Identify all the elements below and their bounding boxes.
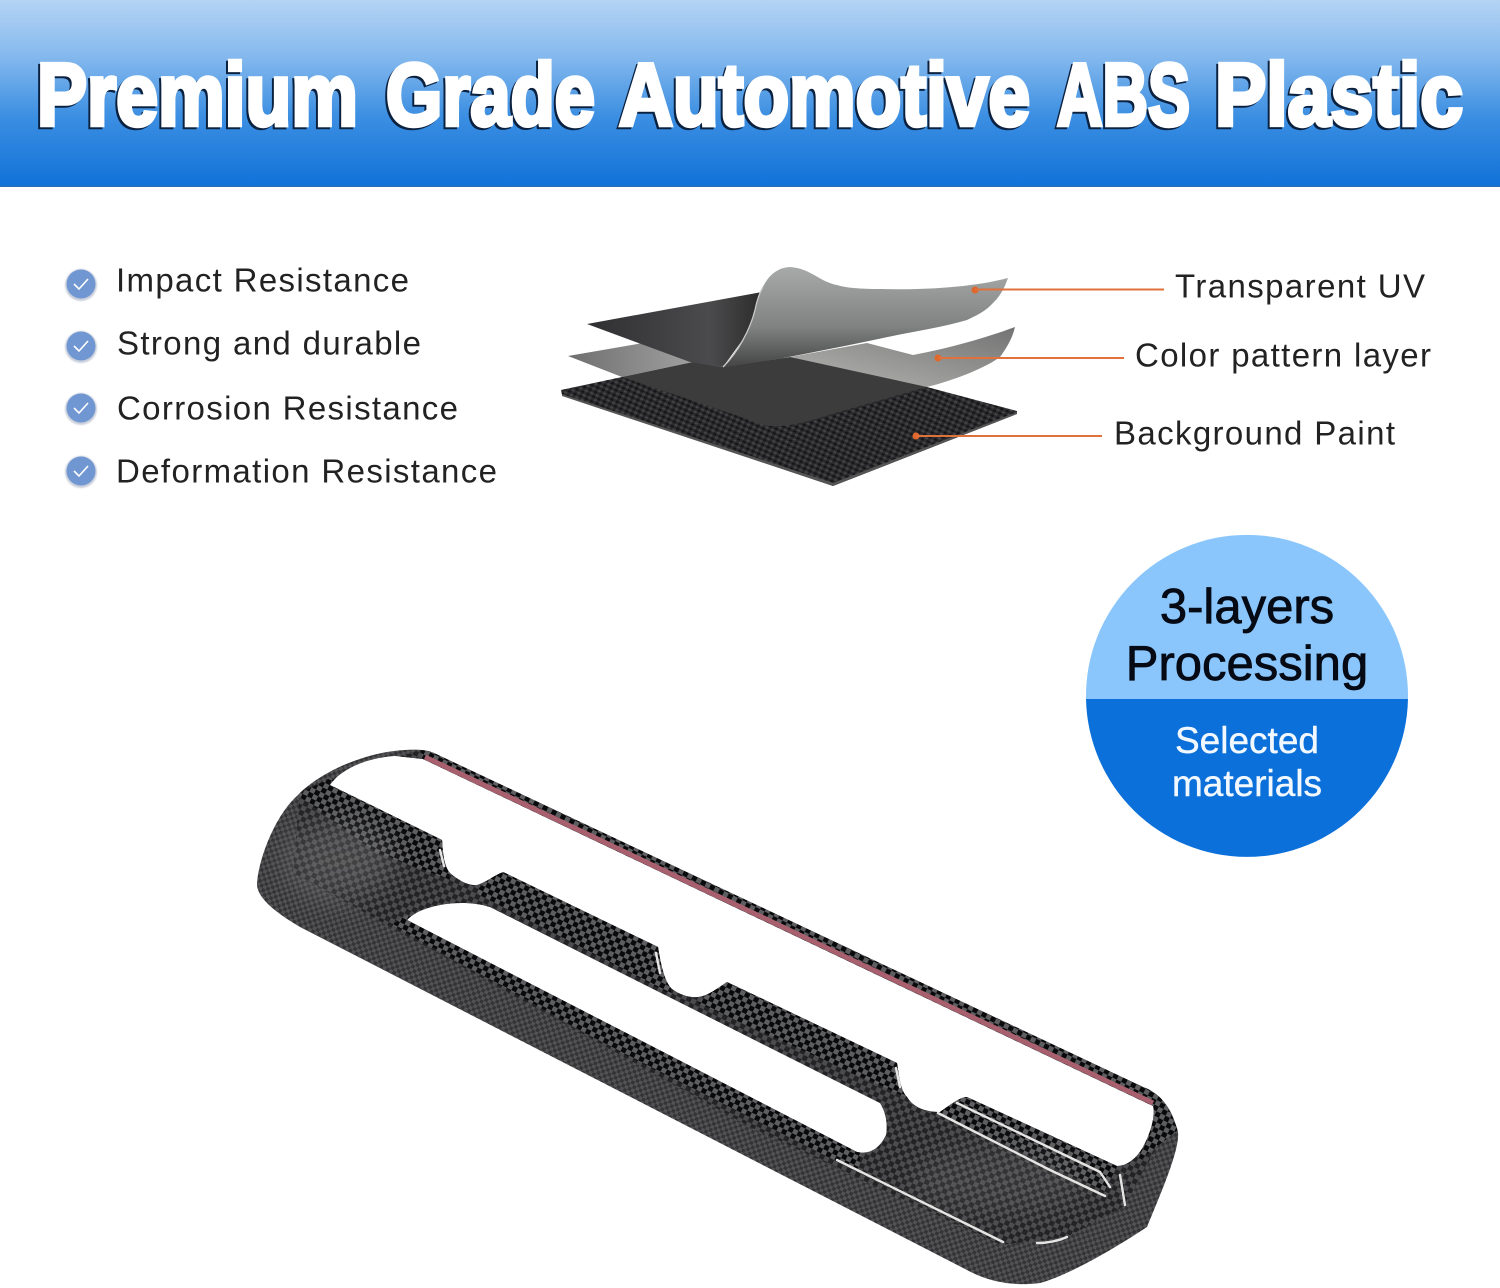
title: Automotive [619, 45, 1030, 144]
callout line: color pattern layer [934, 354, 1124, 362]
item: Impact Resistance: Impact Resistance [116, 262, 409, 298]
item: Deformation Resistance: Deformation Resistance [116, 452, 497, 490]
header banner [0, 0, 1500, 187]
label: Background Paint: Background Paint [1114, 414, 1395, 452]
title [35, 45, 1463, 146]
callout line: background paint [912, 432, 1102, 440]
badge heading: Processing [1126, 637, 1368, 691]
label: Transparent UV: Transparent UV [1175, 268, 1425, 304]
badge heading: 3-layers [1160, 580, 1334, 634]
title: Premium [35, 47, 356, 146]
title: Premium [37, 45, 358, 144]
title: Grade [384, 47, 593, 146]
badge subheading [1172, 720, 1322, 804]
label: Color pattern layer: Color pattern layer [1135, 336, 1431, 374]
title: Automotive [617, 47, 1028, 146]
title: Grade [386, 45, 595, 144]
item: Strong and durable: Strong and durable [117, 324, 421, 362]
title: ABS [1057, 45, 1190, 144]
callout line: transparent UV [972, 286, 1164, 294]
layer diagram [561, 267, 1431, 486]
product: carbon fiber trim frame [240, 740, 1190, 1288]
bottom layer: background paint [561, 377, 1017, 486]
title: Plastic [1213, 47, 1461, 146]
badge: 3-layers processing [1086, 535, 1408, 857]
item: Corrosion Resistance: Corrosion Resistance [117, 390, 458, 426]
top layer: transparent UV [587, 267, 1008, 367]
title: Plastic [1215, 45, 1463, 144]
adhesive strip [425, 757, 1153, 1103]
title: ABS [1055, 47, 1188, 146]
feature checklist [65, 262, 497, 490]
badge subheading: Selected [1175, 720, 1319, 761]
badge heading [1126, 580, 1368, 691]
glossy highlights [440, 850, 1125, 1243]
badge subheading: materials [1172, 763, 1322, 804]
middle layer: color pattern [568, 327, 1015, 426]
